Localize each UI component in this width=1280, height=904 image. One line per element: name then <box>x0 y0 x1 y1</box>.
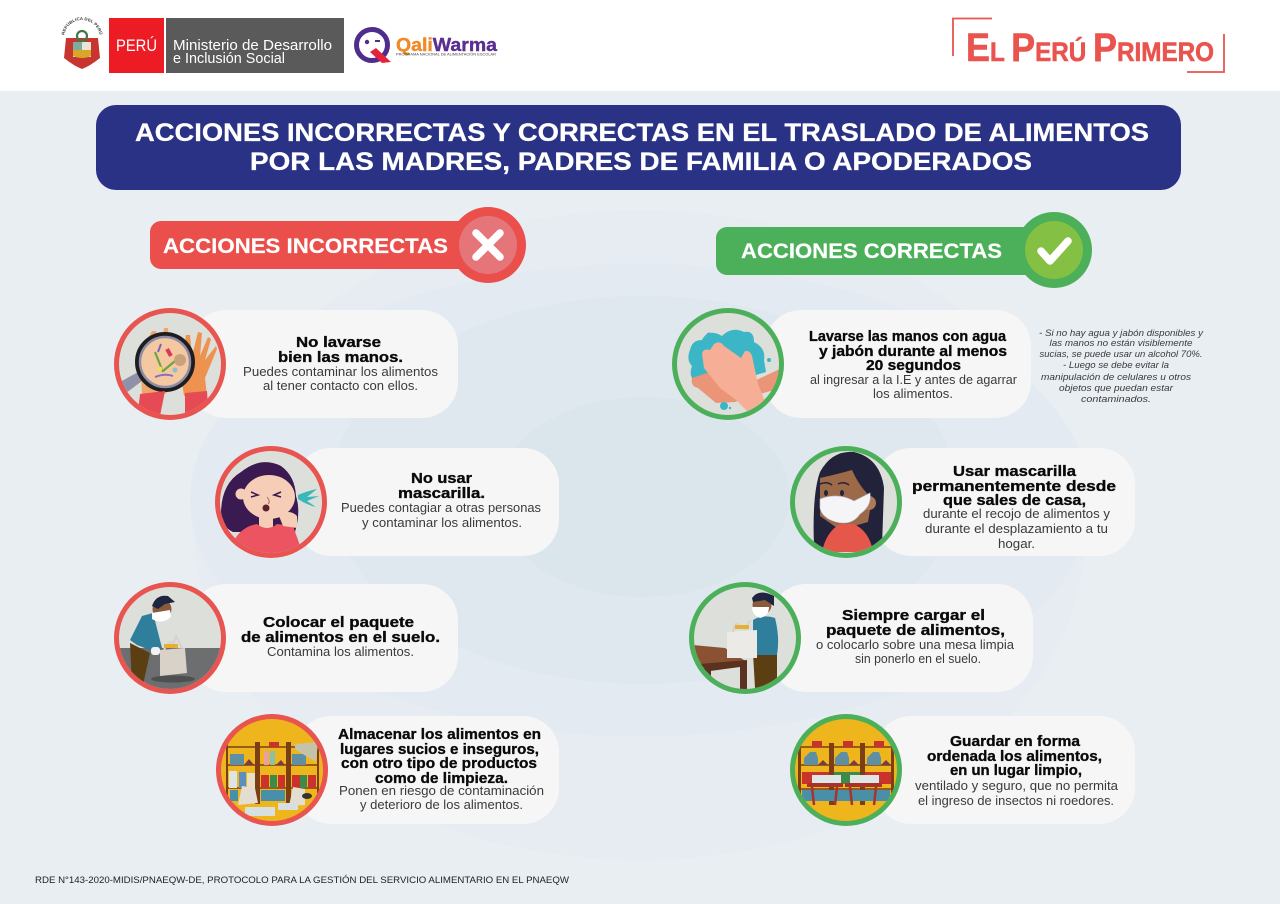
panel: almacenar en lugares sucios: lugares sucios e inseguros, <box>340 741 539 758</box>
icon: coat of arms <box>62 17 103 69</box>
panel: lavarse las manos: Lavarse las manos con agua <box>809 328 1007 345</box>
panel: paquete en el suelo <box>114 582 458 694</box>
panel: usar mascarilla: Usar mascarilla <box>953 463 1077 480</box>
panel: usar mascarilla <box>790 446 1135 558</box>
panel: paquete en el suelo: de alimentos en el suelo. <box>241 629 440 646</box>
panel: usar mascarilla: durante el desplazamiento a tu <box>925 522 1108 536</box>
panel: usar mascarilla: hogar. <box>998 537 1035 551</box>
icon: girl coughing <box>215 446 327 558</box>
icon: coat of arms: REPÚBLICA DEL PERÚ <box>62 17 103 35</box>
panel: almacenar en lugares sucios: con otro tipo de productos <box>341 755 537 772</box>
icon: man holding bag by table <box>689 582 801 694</box>
title banner <box>96 105 1181 190</box>
panel: no usar mascarilla: y contaminar los alimentos. <box>362 516 522 530</box>
icon: man placing bag on floor <box>114 582 226 694</box>
panel: usar mascarilla: permanentemente desde <box>912 478 1116 495</box>
panel: guardar ordenadamente: ordenada los alimentos, <box>927 748 1102 765</box>
panel: no usar mascarilla: Puedes contagiar a otras personas <box>341 501 541 515</box>
panel: cargar el paquete: o colocarlo sobre una mesa limpia <box>816 638 1014 652</box>
panel: cargar el paquete: sin ponerlo en el suelo. <box>855 652 981 666</box>
panel: paquete en el suelo: Contamina los alimentos. <box>267 645 414 659</box>
icon: clean storage shelves <box>790 714 902 826</box>
logo: Qali Warma: QaliWarma <box>396 35 498 55</box>
icon: woman wearing mask <box>790 446 902 558</box>
panel: almacenar en lugares sucios: Almacenar los alimentos en <box>338 726 541 743</box>
panel: lavarse las manos: y jabón durante al menos <box>819 343 1007 360</box>
panel: lavarse las manos: los alimentos. <box>873 387 953 401</box>
icon: hands under magnifier <box>114 308 226 420</box>
panel: almacenar en lugares sucios: y deterioro de los alimentos. <box>360 798 523 812</box>
title banner: ACCIONES INCORRECTAS Y CORRECTAS EN EL TRASLADO DE ALIMENTOS <box>135 119 1149 147</box>
logo: Ministerio <box>166 18 344 73</box>
panel: lavarse las manos: al ingresar a la I.E y antes de agarrar <box>810 373 1017 387</box>
panel: lavarse las manos: 20 segundos <box>866 357 961 374</box>
panel: no usar mascarilla: mascarilla. <box>398 485 485 502</box>
badge: acciones incorrectas: ACCIONES INCORRECTAS <box>163 235 448 258</box>
header band <box>0 0 1280 91</box>
panel: no lavarse las manos <box>114 308 458 420</box>
panel: cargar el paquete: Siempre cargar el <box>842 607 985 624</box>
icon: dirty storage shelves <box>216 714 328 826</box>
logo: Perú <box>109 18 164 73</box>
note: alternativas al jabón: contaminados. <box>1081 394 1151 405</box>
logo: Qali Warma: PROGRAMA NACIONAL DE ALIMENTACIÓN ESCOLAR <box>396 52 496 56</box>
note: alternativas al jabón: objetos que puedan estar <box>1059 383 1174 394</box>
title banner: POR LAS MADRES, PADRES DE FAMILIA O APODERADOS <box>250 148 1032 176</box>
panel: paquete en el suelo: Colocar el paquete <box>263 614 414 631</box>
panel: cargar el paquete <box>689 582 1033 694</box>
note: alternativas al jabón <box>1039 328 1204 405</box>
note: alternativas al jabón: sucias, se puede usar un alcohol 70%. <box>1040 349 1202 360</box>
logo: Ministerio: Ministerio de Desarrollo <box>173 38 332 54</box>
badge: acciones correctas: ACCIONES CORRECTAS <box>741 240 1002 263</box>
panel: usar mascarilla: que sales de casa, <box>943 492 1086 509</box>
panel: no lavarse las manos: al tener contacto con ellos. <box>263 379 418 393</box>
logo: Qali Warma <box>356 30 498 63</box>
panel: no lavarse las manos: bien las manos. <box>278 349 403 366</box>
badge: acciones incorrectas <box>150 207 526 283</box>
panel: lavarse las manos <box>672 308 1031 420</box>
panel: guardar ordenadamente: el ingreso de insectos ni roedores. <box>918 794 1114 808</box>
note: alternativas al jabón: manipulación de celulares u otros <box>1041 372 1191 383</box>
logo: El Perú Primero: EL PERÚ PRIMERO <box>966 26 1214 70</box>
footer citation: RDE N°143-2020-MIDIS/PNAEQW-DE, PROTOCOLO PARA LA GESTIÓN DEL SERVICIO ALIMENTARIO EN EL PNAEQW <box>35 875 569 886</box>
panel: guardar ordenadamente: en un lugar limpio, <box>950 762 1082 779</box>
panel: almacenar en lugares sucios <box>216 714 559 826</box>
panel: usar mascarilla: durante el recojo de alimentos y <box>923 507 1111 521</box>
panel: almacenar en lugares sucios: Ponen en riesgo de contaminación <box>339 784 544 798</box>
icon: washing hands <box>672 308 784 420</box>
panel: no lavarse las manos: Puedes contaminar los alimentos <box>243 365 438 379</box>
logo: Perú: PERÚ <box>116 36 157 55</box>
note: alternativas al jabón: - Luego se debe evitar la <box>1063 360 1169 371</box>
panel: almacenar en lugares sucios: como de limpieza. <box>375 770 508 787</box>
panel: no usar mascarilla <box>215 446 559 558</box>
badge: acciones correctas <box>716 212 1092 288</box>
note: alternativas al jabón: - Si no hay agua y jabón disponibles y <box>1039 328 1204 339</box>
panel: guardar ordenadamente <box>790 714 1135 826</box>
panel: no usar mascarilla: No usar <box>411 470 472 487</box>
panel: guardar ordenadamente: ventilado y seguro, que no permita <box>915 779 1118 793</box>
panel: cargar el paquete: paquete de alimentos, <box>826 622 1005 639</box>
panel: no lavarse las manos: No lavarse <box>296 334 381 351</box>
logo: Ministerio: e Inclusión Social <box>173 51 285 67</box>
panel: guardar ordenadamente: Guardar en forma <box>950 733 1081 750</box>
note: alternativas al jabón: las manos no están visiblemente <box>1050 338 1192 349</box>
